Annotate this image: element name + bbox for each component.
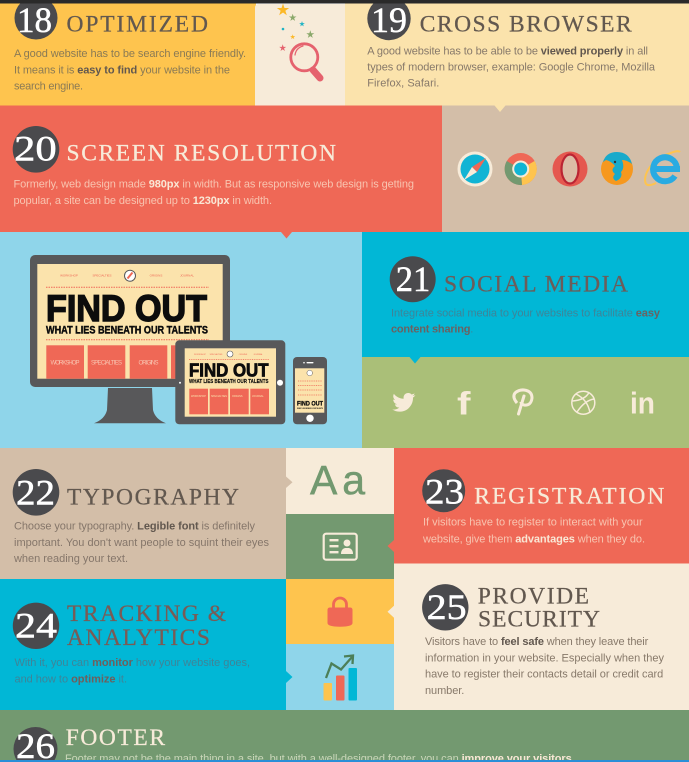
illustration: tablet: SPECIALTIES [210,353,223,356]
text: security description: Visitors have to feel safe when they leave their [425,636,649,648]
illustration: tablet: WHAT LIES BENEATH OUR TALENTS [189,379,269,385]
number badge 25: 25 [427,587,467,627]
text: screen resolution description: Formerly, web design made 980px in width. But as responsive web design is getting [14,179,414,191]
text: registration description [422,517,645,545]
text: optimized description: search engine. [14,80,83,92]
text: security description: number. [425,685,464,697]
icon: facebook: f [457,385,471,421]
text: social media description: Integrate social media to your websites to facilitate easy [391,308,661,320]
arrow: typography pointer [286,476,292,488]
panel: Aa icon [286,448,394,514]
panel: registration card icon [286,514,394,579]
icon: chrome [505,153,537,185]
text: optimized description: A good website has to be search engine friendly. [14,48,246,60]
text: security description: information in your website. Especially when they [425,653,664,665]
text: social media description: content sharing. [391,324,473,336]
heading: tracking and analytics [67,601,226,651]
arrow: tracking pointer [286,671,292,683]
panel: 23 registration [388,448,689,564]
heading: footer: FOOTER [66,725,165,751]
number badge 21 [390,256,436,302]
text: optimized description: It means it is easy to find your website in the [14,64,230,76]
text: typography description: important. You don't want people to squint their eyes [14,537,270,549]
illustration: tablet: WORKSHOP [191,395,206,398]
illustration: desktop monitor: SPECIALTIES [91,360,122,366]
illustration: desktop monitor: FIND OUT [46,288,207,329]
illustration: desktop monitor: ORIGINS [138,360,158,366]
panel: 25 provide security [388,564,689,710]
text: cross browser description: A good website has to be able to be viewed properly in all [367,45,648,57]
text: cross browser description: Firefox, Safari. [367,78,439,90]
text: typography description: Choose your typography. Legible font is definitely [14,521,256,533]
icon: growth bar chart [324,656,357,700]
icon: magnifier [291,44,320,78]
top window edge [0,0,689,4]
illustration: phone [293,357,327,424]
text: registration description: website, give them advantages when they do. [422,533,645,545]
text: screen resolution description [14,179,414,207]
panel: magnifier icon [255,4,346,106]
icon: padlock [328,598,352,627]
text: typography description: when reading your text. [13,553,128,565]
illustration: tablet [175,340,285,424]
number badge 22 [13,469,59,516]
heading: typography: TYPOGRAPHY [67,484,239,510]
illustration: tablet: FIND OUT [189,360,268,380]
text: tracking description [14,657,250,685]
icon: Aa letters: Aa [310,457,365,503]
illustration: desktop monitor: JOURNAL [180,274,194,278]
heading: optimized: OPTIMIZED [66,12,208,38]
panel: responsive devices [0,232,362,448]
panel: 20 screen resolution [0,106,442,232]
bottom window edge [0,760,689,762]
text: security description: have to register their contacts detail or credit card [425,669,663,681]
illustration: desktop monitor: WHAT LIES BENEATH OUR TALENTS [46,325,208,337]
illustration: tablet: SPECIALTIES [211,395,227,398]
panel: 22 typography [0,448,286,579]
text: typography description [13,521,270,565]
icon: id card [324,534,357,560]
panel: lock icon [286,579,394,644]
text: tracking description: and how to optimize it. [14,673,127,685]
heading: cross browser: CROSS BROWSER [420,12,632,38]
heading: tracking and analytics: TRACKING & [67,601,226,627]
heading: registration: REGISTRATION [474,483,664,509]
icon: opera [552,152,588,186]
text: social media description [391,308,661,336]
arrow: security pointer [388,606,394,618]
arrow: social media pointer [410,357,420,364]
number badge 19: 19 [371,0,407,40]
heading: provide security: SECURITY [478,607,600,633]
text: screen resolution description: popular, a site can be designed up to 1230px in width. [14,195,272,207]
number badge 20 [13,126,59,173]
arrow: cross browser pointer [494,106,506,112]
text: tracking description: With it, you can monitor how your website goes, [14,657,250,669]
arrow: screen resolution pointer [281,232,292,238]
number badge 24: 24 [15,606,57,646]
illustration: tablet: JOURNAL [252,395,264,398]
illustration: tablet: JOURNAL [253,353,264,356]
number badge 24 [13,603,59,649]
text: cross browser description: types of modern browser, example: Google Chrome, Mozilla [367,62,656,74]
panel: 24 tracking and analytics [0,579,286,710]
arrow: registration pointer [388,540,394,552]
number badge 20: 20 [14,129,57,169]
icon: twitter [392,393,415,412]
illustration: desktop monitor [30,255,230,423]
heading: tracking and analytics: ANALYTICS [67,625,210,651]
illustration: tablet: WORKSHOP [194,354,207,356]
text: optimized description [14,48,246,92]
illustration: phone: WHAT LIES BENEATH OUR TALENTS [297,407,323,410]
icon: safari [458,152,492,186]
illustration: desktop monitor: ORIGINS [150,274,162,278]
illustration: desktop monitor: WORKSHOP [50,360,80,366]
heading: screen resolution: SCREEN RESOLUTION [66,141,336,167]
heading: provide security: PROVIDE [478,583,589,609]
panel: 19 cross browser [345,0,689,105]
heading: social media: SOCIAL MEDIA [444,272,628,298]
panel: chart icon [286,644,394,710]
number badge 22: 22 [16,472,55,512]
illustration: desktop monitor: SPECIALTIES [92,274,112,278]
icon: firefox [601,152,633,185]
panel: 21 social media [362,232,689,357]
icon: dribbble [572,391,595,414]
number badge 25 [422,584,468,630]
text: security description [425,636,664,697]
icon: stars [277,4,314,51]
illustration: tablet: ORIGINS [239,354,248,356]
text: cross browser description [367,45,656,90]
icon: linkedin: in [630,385,655,420]
number badge 21: 21 [396,259,430,299]
number badge 23: 23 [425,471,464,511]
illustration: phone: FIND OUT [297,401,323,408]
panel: 26 footer [0,710,689,762]
panel: browser icons [442,106,689,232]
panel: 18 optimized [0,0,256,106]
icon: pinterest [514,390,532,414]
illustration: desktop monitor: WORKSHOP [60,274,78,278]
icon: internet explorer [645,151,680,185]
panel: social icons [362,357,689,448]
illustration: tablet: ORIGINS [232,395,243,398]
text: registration description: If visitors have to register to interact with your [423,517,643,529]
number badge 18: 18 [17,0,52,40]
heading: provide security [478,583,600,633]
